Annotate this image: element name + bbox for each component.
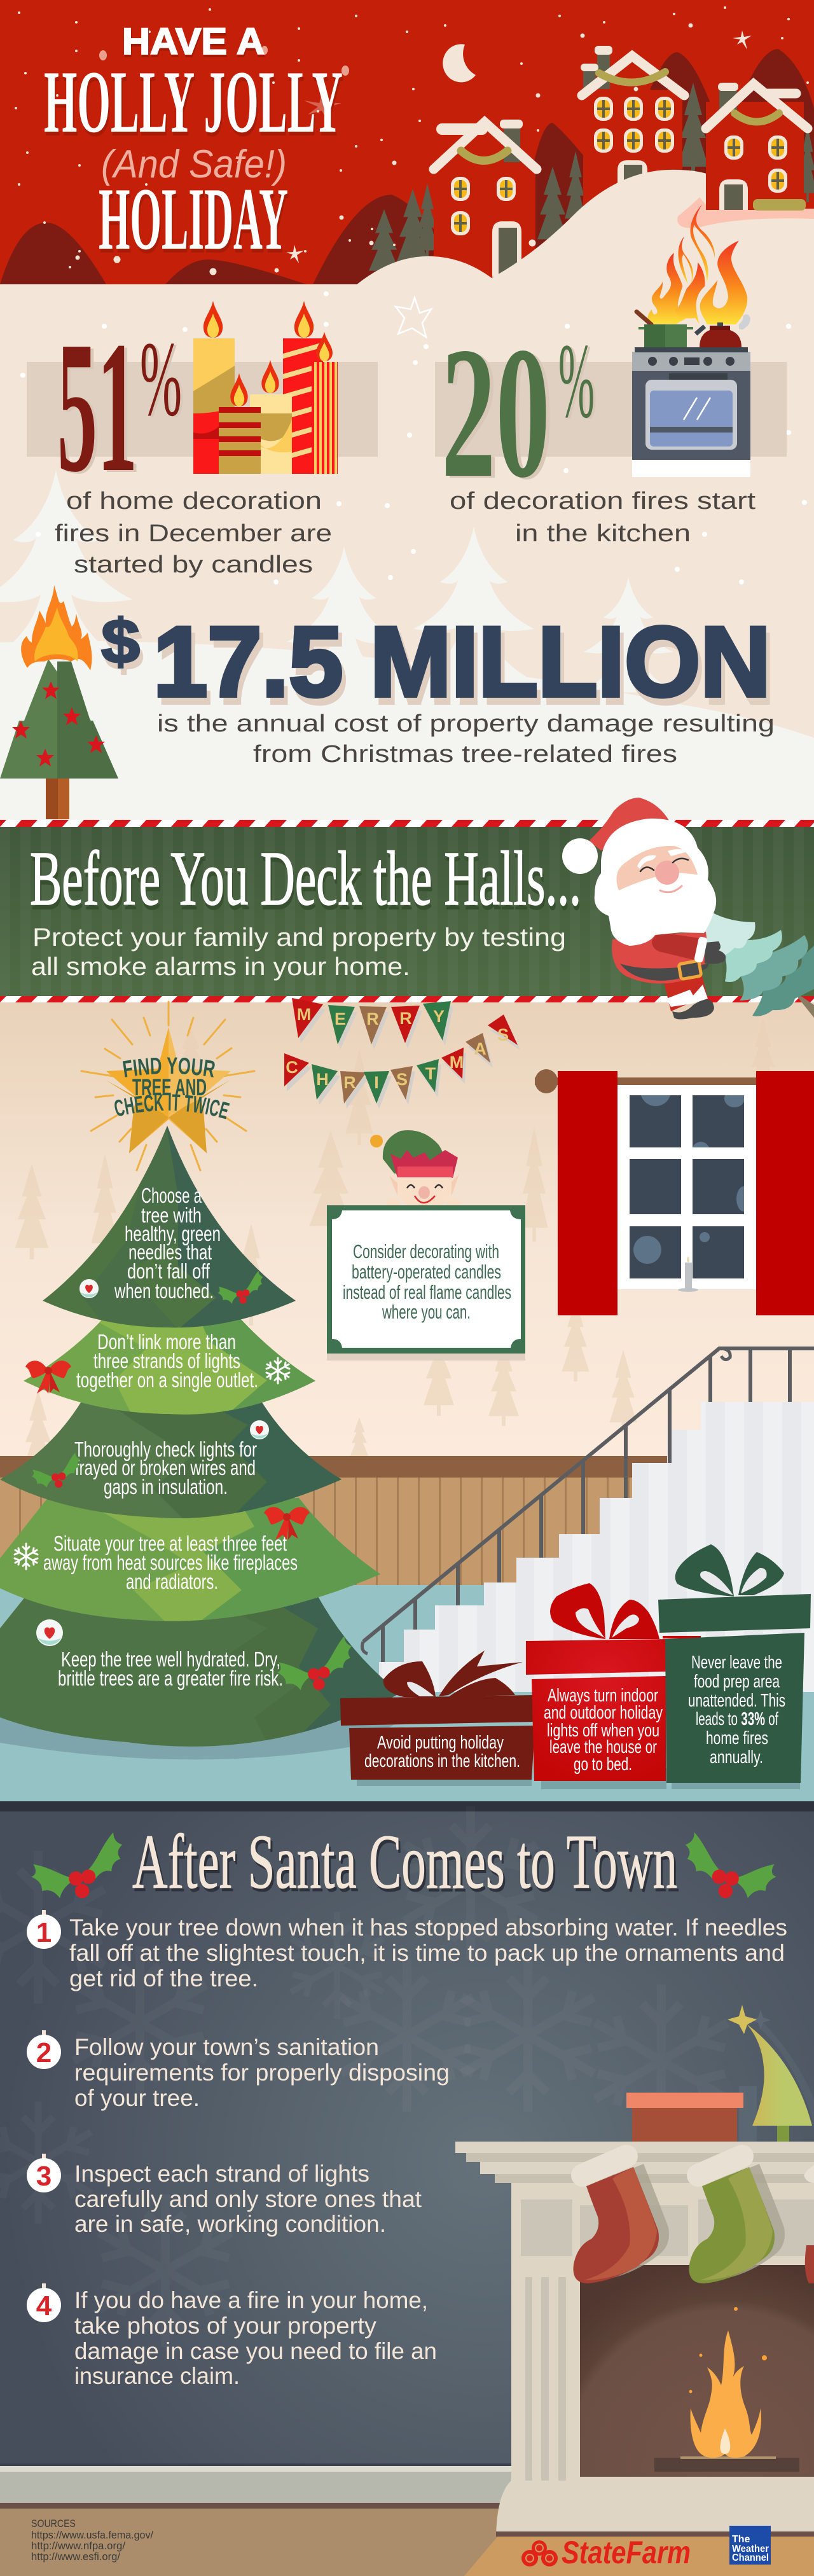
tip 2: [27, 2030, 450, 2111]
heading: and safe: (And Safe!): [101, 142, 287, 186]
tree texts: away from heat sources like fireplaces: [43, 1551, 298, 1574]
banner: christmas: H: [316, 1070, 329, 1089]
tree texts: Situate your tree at least three feet: [53, 1532, 287, 1555]
tip 1: 1: [36, 1917, 52, 1948]
panel: after santa comes to town: [0, 1801, 814, 2576]
pine trees: [369, 83, 814, 279]
banner: merry: R: [399, 1009, 412, 1028]
stat: 20: 20: [441, 308, 550, 517]
tip 2: of your tree.: [74, 2085, 200, 2111]
tip 1: fall off at the slightest touch, it is time to pack up the ornaments and: [69, 1940, 785, 1966]
icon: burning stove: [632, 205, 750, 477]
tree texts: Don’t link more than: [97, 1330, 236, 1354]
tree texts: don’t fall off: [127, 1259, 210, 1283]
snow dots: [23, 294, 804, 582]
gift: food prep area: food prep area: [694, 1672, 780, 1692]
banner: merry: E: [335, 1009, 346, 1028]
logo: the weather channel: Weather: [732, 2544, 769, 2554]
heading: have a: HAVE A: [122, 21, 265, 62]
floor: [0, 1585, 814, 1801]
sketch star: [396, 298, 431, 337]
stat band right: [435, 362, 787, 457]
text: candles stat: of home decoration: [66, 488, 322, 515]
icon: bent tree: [728, 2005, 814, 2142]
panel: hero: [0, 0, 814, 285]
rug floor: [464, 2535, 814, 2576]
wainscot panels: [0, 1478, 700, 1586]
panel: room scene background: [0, 1002, 814, 1801]
candle on sill: [678, 1256, 698, 1292]
panel: before you deck the halls: [0, 798, 814, 1019]
decorative pale dots: [99, 46, 349, 76]
tip 4: take photos of your property: [74, 2313, 377, 2339]
text: kitchen stat: [450, 488, 756, 547]
panel: statistics: %: [140, 320, 182, 438]
banner: merry: M: [297, 1005, 311, 1024]
panel: statistics: %: [558, 322, 595, 440]
star topper: [80, 1001, 256, 1172]
sign text: battery-operated candles: [352, 1261, 501, 1283]
stairs: [362, 1348, 814, 1692]
window with curtains: [535, 1069, 814, 1315]
tree texts: brittle trees are a greater fire risk.: [58, 1666, 283, 1690]
banner: merry: [292, 998, 453, 1049]
icon: santa carrying tree: [562, 798, 814, 1019]
icon: holly right: [686, 1832, 776, 1898]
tree texts: Thoroughly check lights for: [74, 1437, 257, 1461]
gift: food prep area: leads to 33% of: [696, 1709, 779, 1729]
sources: https://www.usfa.fema.gov/: [31, 2529, 153, 2541]
fire: [691, 2330, 761, 2458]
tip 3: are in safe, working condition.: [74, 2211, 386, 2237]
text: candles stat: [55, 488, 332, 578]
snowflake pattern: [0, 1806, 728, 2347]
santa body: [612, 932, 709, 983]
house left: [434, 120, 537, 279]
tier 1: [43, 1126, 296, 1328]
tree texts: together on a single outlet.: [76, 1368, 258, 1392]
tip 4: If you do have a fire in your home,: [74, 2287, 428, 2313]
sparkle stars: [286, 31, 752, 263]
star text: [114, 1057, 230, 1119]
banner: christmas: [284, 1014, 520, 1109]
house right: [706, 83, 808, 211]
distant hills: [0, 49, 814, 284]
tree texts: healthy, green: [125, 1222, 221, 1245]
tip 4: 4: [36, 2290, 52, 2322]
stat band left: [27, 362, 378, 457]
tip 4: [27, 2283, 437, 2389]
baseboard: [0, 2463, 515, 2509]
tree texts: when touched.: [114, 1279, 214, 1303]
banner: christmas: S: [396, 1070, 408, 1089]
text: cost description: [157, 710, 775, 768]
logo: the weather channel: [729, 2526, 771, 2565]
tree texts: tree with: [141, 1203, 202, 1227]
banner: merry: R: [366, 1009, 379, 1028]
gift: food prep area: home fires: [706, 1728, 768, 1748]
gift: avoid holiday decorations: [340, 1651, 535, 1786]
logo: the weather channel: The: [732, 2534, 750, 2545]
snowy trees background: [0, 470, 814, 820]
tree texts: and radiators.: [126, 1570, 218, 1593]
tree texts: three strands of lights: [93, 1349, 240, 1373]
icon: holly left: [31, 1832, 122, 1898]
banner: christmas: S: [497, 1025, 509, 1044]
stat: 17.5 million: 17.5 MILLION: [153, 607, 771, 717]
tree shadow: [0, 1717, 407, 1759]
snow hill: [356, 170, 814, 285]
tree texts: [43, 1184, 298, 1690]
flames: [647, 205, 747, 324]
santa legs: [663, 973, 707, 1011]
fireplace: [455, 2142, 814, 2537]
wallpaper trees: [15, 1019, 777, 1479]
gift: turn lights off: lights off when you: [547, 1721, 659, 1741]
tip 1: [27, 1910, 787, 1991]
text: candles stat: fires in December are: [55, 520, 332, 547]
gift: food prep area: annually.: [710, 1747, 763, 1768]
tip 2: Follow your town’s sanitation: [74, 2034, 379, 2060]
gift: turn lights off: leave the house or: [549, 1737, 657, 1757]
moon: [443, 44, 476, 82]
sources: http://www.nfpa.org/: [31, 2540, 125, 2552]
sources: http://www.esfi.org/: [31, 2551, 120, 2563]
star text: FIND YOUR: [122, 1057, 215, 1077]
text: kitchen stat: in the kitchen: [515, 520, 691, 547]
text: cost description: from Christmas tree-related fires: [253, 741, 677, 768]
santa head and beard: [595, 819, 716, 946]
panel: hero: HOLLY JOLLY: [44, 53, 343, 151]
tier 4: [0, 1495, 388, 1628]
star text: CHECK IT TWICE: [114, 1094, 230, 1119]
icon: candles: [193, 301, 338, 474]
stat: 17.5 million: $: [101, 606, 140, 676]
tip 4: damage in case you need to file an: [74, 2338, 437, 2364]
panel: statistics: [0, 205, 814, 820]
tree texts: Keep the tree well hydrated. Dry,: [61, 1647, 280, 1671]
text: kitchen stat: of decoration fires start: [450, 488, 756, 515]
banner: merry: Y: [433, 1007, 445, 1026]
logo: the weather channel: Channel: [732, 2552, 769, 2563]
icon: burning tree: [0, 585, 118, 819]
panel: statistics: 51: [57, 303, 137, 511]
tip 3: carefully and only store ones that: [74, 2186, 422, 2212]
sign text: where you can.: [382, 1301, 471, 1323]
subheading: [31, 924, 566, 981]
logo: state farm: StateFarm: [562, 2535, 691, 2570]
gift: turn lights off: and outdoor holiday: [544, 1703, 663, 1723]
gift: turn lights off: [526, 1583, 701, 1789]
subheading: all smoke alarms in your home.: [31, 953, 410, 981]
gift: turn lights off: Always turn indoor: [548, 1686, 658, 1706]
banner: christmas: M: [450, 1053, 464, 1072]
panel: hero: HOLIDAY: [99, 170, 288, 268]
tree texts: gaps in insulation.: [104, 1475, 228, 1499]
logo: state farm: [521, 2535, 691, 2570]
sources: SOURCES: [31, 2517, 76, 2530]
subheading: Protect your family and property by testing: [32, 924, 566, 952]
santa hat: [589, 798, 669, 850]
banner: christmas: I: [374, 1073, 379, 1092]
tree texts: Choose a: [141, 1184, 202, 1207]
tip 4: insurance claim.: [74, 2363, 240, 2389]
tier 3: [0, 1399, 343, 1523]
tip 3: [27, 2154, 422, 2237]
banner: christmas: C: [286, 1058, 298, 1077]
sign with elf: [327, 1130, 525, 1361]
sign text: [343, 1240, 511, 1323]
text: cost description: is the annual cost of property damage resulting: [157, 710, 775, 737]
tip 3: Inspect each strand of lights: [74, 2161, 369, 2187]
pink glow: [677, 197, 814, 228]
tier 5: [0, 1597, 397, 1747]
tip 1: get rid of the tree.: [69, 1965, 258, 1991]
tip 3: 3: [36, 2161, 52, 2192]
tip 1: Take your tree down when it has stopped absorbing water. If needles: [69, 1915, 787, 1941]
falling snow: [16, 8, 808, 272]
tree texts: needles that: [128, 1240, 212, 1264]
sign text: instead of real flame candles: [343, 1281, 511, 1303]
tip 2: requirements for properly disposing: [74, 2060, 450, 2086]
dark header strip: [0, 1801, 814, 1811]
gift: food prep area: [658, 1544, 811, 1789]
gift: avoid holiday decorations: Avoid putting holiday: [377, 1733, 504, 1753]
house middle: [581, 46, 684, 214]
banner: christmas: A: [474, 1039, 486, 1058]
tier 2: [24, 1319, 315, 1415]
ornaments: [15, 1271, 352, 1690]
sign text: Consider decorating with: [353, 1240, 499, 1263]
tree texts: frayed or broken wires and: [75, 1456, 256, 1479]
christmas tree: [0, 1123, 407, 1759]
gift: turn lights off: go to bed.: [574, 1754, 632, 1775]
wainscot rail: [0, 1456, 700, 1478]
wood floor: [0, 2509, 509, 2576]
candy stripe bottom: [0, 996, 814, 1002]
icon: chimney: [626, 2093, 743, 2142]
tip 2: 2: [36, 2037, 52, 2068]
gift: avoid holiday decorations: decorations in the kitchen.: [364, 1751, 520, 1771]
text: candles stat: started by candles: [74, 551, 313, 578]
banner: christmas: T: [425, 1064, 436, 1083]
carried tree: [688, 892, 814, 1018]
railing: [362, 1348, 814, 1662]
sources: [31, 2517, 153, 2563]
banner: christmas: R: [343, 1073, 356, 1092]
icon: stockings: [573, 2156, 814, 2283]
candy stripe top: [0, 820, 814, 827]
star text: TREE AND: [132, 1074, 207, 1100]
elf: [370, 1130, 460, 1208]
